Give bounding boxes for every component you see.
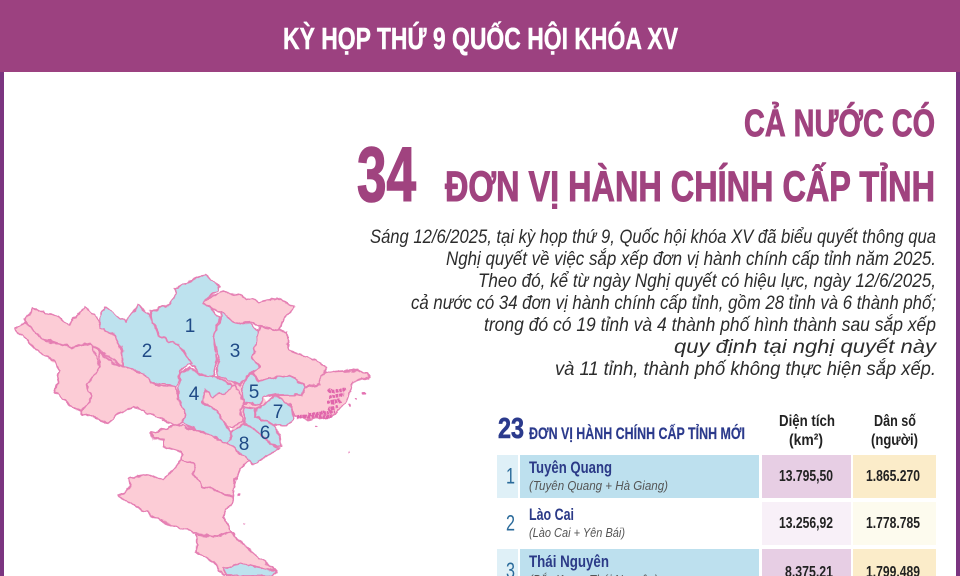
- map numbers: 1: [185, 316, 195, 337]
- table row 2: (Lào Cai + Yên Bái): [529, 525, 625, 540]
- table row 1: Tuyên Quang: [529, 458, 612, 477]
- map numbers: 3: [230, 341, 240, 362]
- blue merged provinces: [100, 274, 305, 576]
- column heading: area: Diện tích: [779, 413, 835, 430]
- map numbers: [142, 316, 283, 455]
- title: [357, 101, 935, 218]
- table heading: [498, 413, 745, 445]
- left page border: [0, 72, 4, 576]
- column heading: population: Dân số: [874, 413, 916, 430]
- table row 1: 1.865.270: [866, 468, 920, 485]
- table row 2: 2: [506, 510, 515, 536]
- intro paragraph: [370, 227, 938, 380]
- header banner: KỲ HỌP THỨ 9 QUỐC HỘI KHÓA XV: [283, 20, 678, 56]
- header banner: [0, 0, 960, 72]
- title: 34: [357, 132, 416, 218]
- table row 1: 13.795,50: [779, 468, 833, 485]
- map numbers: 5: [249, 382, 259, 403]
- table row 1: (Tuyên Quang + Hà Giang): [529, 478, 668, 493]
- right page border: [956, 72, 960, 576]
- map numbers: 2: [142, 341, 152, 362]
- gap underlays: [33, 327, 267, 430]
- intro paragraph: quy định tại nghị quyết này: [674, 337, 938, 358]
- table row 1: 1: [506, 464, 515, 488]
- map numbers: 7: [273, 402, 283, 423]
- table row 2: 1.778.785: [866, 515, 920, 532]
- map numbers: 6: [260, 423, 270, 444]
- table row 2: Lào Cai: [529, 505, 574, 524]
- intro paragraph: và 11 tỉnh, thành phố không thực hiện sắp xếp.: [555, 359, 936, 380]
- column heading: population: [871, 413, 918, 449]
- table row 3: Thái Nguyên: [529, 552, 609, 571]
- table row 3: [497, 549, 936, 576]
- Quang Ninh islands: [297, 390, 345, 417]
- map numbers: 8: [239, 434, 249, 455]
- column heading: area: [779, 413, 835, 449]
- column heading: population: (người): [871, 432, 918, 449]
- map of northern Vietnam: [15, 274, 370, 576]
- table row 2: 13.256,92: [779, 515, 833, 532]
- small offshore islets: [238, 392, 365, 525]
- pink provinces: [15, 292, 370, 576]
- table row 2: [506, 502, 936, 545]
- column heading: area: (km²): [789, 432, 823, 449]
- map numbers: 4: [189, 384, 200, 405]
- table heading: ĐƠN VỊ HÀNH CHÍNH CẤP TỈNH MỚI: [529, 424, 745, 443]
- table row 1: [497, 455, 936, 498]
- table heading: 23: [498, 413, 524, 445]
